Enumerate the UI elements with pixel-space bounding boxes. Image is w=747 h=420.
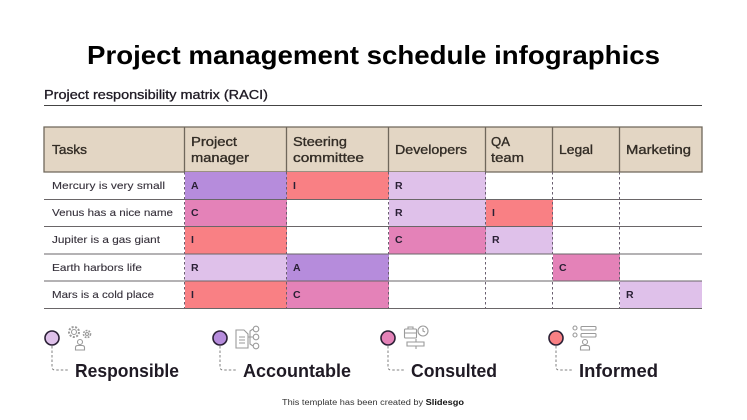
marker	[213, 331, 227, 345]
cell letters: R	[626, 289, 634, 301]
cell letters: R	[395, 207, 403, 219]
legend: Consulted	[381, 326, 497, 381]
label: Responsible	[75, 361, 179, 381]
cell letters: C	[293, 289, 301, 301]
icon: document and nodes	[236, 326, 259, 349]
credit line: This template has been created by Slidesgo	[282, 398, 464, 407]
table header row: Legal	[559, 142, 593, 157]
cell letters: I	[293, 180, 296, 192]
legend: Responsible	[45, 327, 179, 381]
task names: Mars is a cold place	[52, 289, 154, 301]
marker	[45, 331, 59, 345]
task names: Mercury is very small	[52, 180, 165, 192]
cell letters: I	[191, 234, 194, 246]
RACI table	[44, 127, 702, 308]
task names: Jupiter is a gas giant	[52, 234, 160, 246]
cell letters: C	[559, 262, 567, 274]
table header row: committee	[293, 150, 364, 165]
legend: Accountable	[213, 326, 351, 381]
table header row: Marketing	[626, 142, 691, 157]
table header row: team	[491, 150, 524, 165]
cell letters: R	[492, 234, 500, 246]
marker	[549, 331, 563, 345]
table header row: Tasks	[52, 142, 88, 157]
cell letters: A	[191, 180, 199, 192]
task names: Venus has a nice name	[52, 207, 173, 219]
label: Accountable	[243, 361, 351, 381]
cell letters: C	[191, 207, 199, 219]
cell letters: R	[191, 262, 199, 274]
table header row: manager	[191, 150, 250, 165]
cell letters: R	[395, 180, 403, 192]
label: Informed	[579, 361, 658, 381]
table header row	[44, 127, 702, 172]
title: Project management schedule infographics	[87, 40, 660, 70]
cell letters: A	[293, 262, 301, 274]
label: Consulted	[411, 361, 497, 381]
cell letters: I	[492, 207, 495, 219]
task names: Earth harbors life	[52, 262, 142, 274]
table header row: Steering	[293, 134, 347, 149]
cell letters	[191, 180, 634, 301]
icon: list and person	[573, 326, 596, 350]
legend: Informed	[549, 326, 658, 381]
task names	[52, 180, 173, 301]
table header row: Project	[191, 134, 237, 149]
icon: gears and person	[69, 327, 90, 350]
subtitle with rule: Project responsibility matrix (RACI)	[44, 88, 268, 102]
icon: briefcase, clock and signpost	[404, 326, 428, 349]
cell letters: I	[191, 289, 194, 301]
table header row: Developers	[395, 142, 468, 157]
coloured RACI cells	[185, 172, 702, 308]
table header row: QA	[491, 134, 510, 149]
cell letters: C	[395, 234, 403, 246]
marker	[381, 331, 395, 345]
